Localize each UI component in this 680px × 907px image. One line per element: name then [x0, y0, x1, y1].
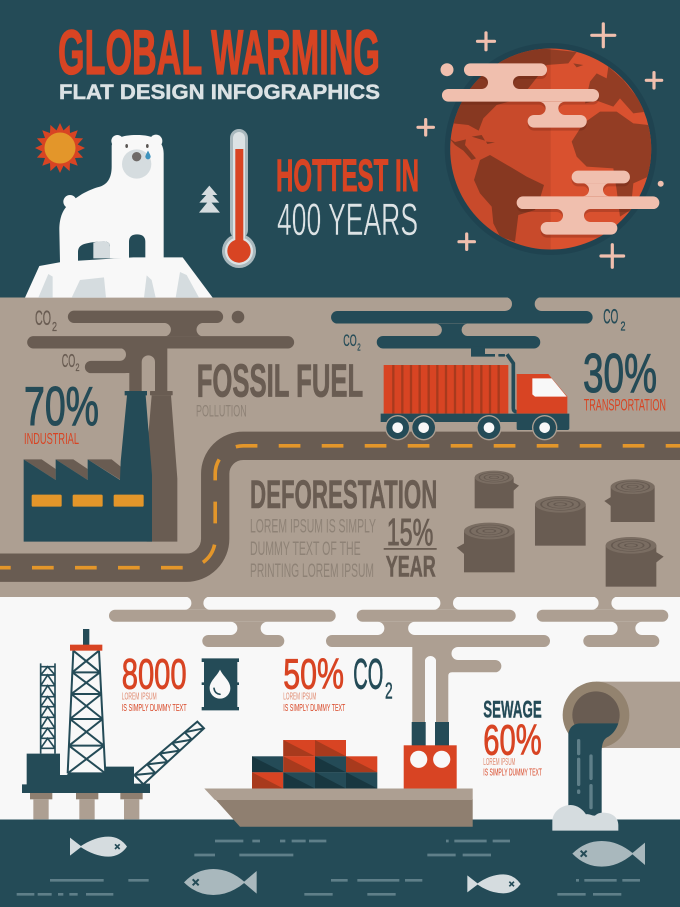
smoke: lower clouds: [115, 596, 662, 722]
caption: 60 percent: LOREM IPSUM: [483, 757, 515, 768]
fish 1: [70, 837, 127, 857]
caption: 50 percent: [283, 692, 345, 714]
caption: 8000: LOREM IPSUM: [122, 692, 157, 702]
stat: 50 percent: 50%: [283, 650, 344, 698]
label: CO2 large: 2: [385, 677, 393, 703]
water ripples: [17, 841, 640, 894]
caption: 50 percent: IS SIMPLY DUMMY TEXT: [283, 703, 345, 714]
label: CO2 large: CO: [353, 650, 383, 698]
title: GLOBAL WARMING: [58, 18, 380, 88]
icon: tree stumps: [457, 471, 664, 587]
label: CO2 truck right: [603, 305, 626, 334]
truck: [381, 347, 569, 440]
text block: lorem ipsum: [250, 515, 376, 582]
label: CO2 lower left: CO: [62, 351, 75, 371]
stat: 8000: 8000: [122, 650, 187, 698]
ship: [204, 722, 473, 827]
stat: 15 percent per year: YEAR: [386, 551, 436, 584]
caption: 50 percent: LOREM IPSUM: [283, 692, 316, 702]
stars: [418, 24, 662, 267]
chassis: [381, 414, 569, 430]
stat: 70 percent: 70%: [24, 375, 99, 437]
windows: [32, 495, 144, 507]
label: CO2 truck left: 2: [357, 343, 361, 354]
background: dark sky: [0, 0, 680, 298]
bear: [59, 135, 164, 263]
derrick: [68, 651, 105, 773]
splash: [552, 805, 618, 831]
label: CO2 top left: CO: [35, 307, 51, 330]
heading: fossil fuel: FOSSIL FUEL: [197, 355, 363, 407]
icon: polar bear on iceberg: [25, 135, 213, 298]
container: [384, 365, 508, 414]
icon: earth with clouds: [418, 24, 664, 267]
stat: 60 percent: 60%: [483, 716, 542, 764]
platform: [22, 754, 150, 793]
stump 4: [457, 523, 515, 572]
label: CO2 truck left: CO: [343, 331, 357, 350]
label: pollution: POLLUTION: [196, 402, 247, 421]
stump 5: [606, 537, 664, 587]
crane: [134, 722, 204, 784]
headline: hottest: HOTTEST IN: [276, 150, 419, 201]
background: white sky: [0, 597, 680, 820]
containers: [252, 740, 377, 788]
stat: 15 percent per year: 15%: [387, 512, 433, 554]
sewage flow: [568, 723, 618, 817]
label: sewage: SEWAGE: [483, 697, 542, 724]
label: CO2 top left: [35, 307, 57, 334]
label: CO2 lower left: 2: [76, 362, 80, 374]
hull: [204, 788, 473, 827]
brown chimney: [147, 391, 177, 542]
funnels: [412, 722, 449, 746]
caption: 8000: IS SIMPLY DUMMY TEXT: [122, 703, 187, 714]
text block: lorem ipsum: PRINTING LOREM IPSUM: [250, 560, 374, 582]
background: sea: [0, 820, 680, 907]
label: CO2 lower left: [62, 351, 80, 374]
caption: 60 percent: IS SIMPLY DUMMY TEXT: [483, 768, 542, 778]
factory: [24, 391, 177, 542]
mast: [70, 629, 102, 651]
label: CO2 top left: 2: [52, 319, 57, 334]
cab: [517, 374, 567, 414]
exhaust: [471, 347, 517, 412]
oil rig: [22, 629, 239, 819]
stat: 15 percent per year: [384, 512, 437, 584]
fish 2: [184, 869, 257, 895]
cabin: [404, 745, 457, 788]
stump 1: [475, 471, 519, 508]
heading: deforestation: DEFORESTATION: [250, 473, 437, 517]
roof shadows: [24, 459, 121, 480]
label: CO2 truck right: CO: [603, 305, 618, 328]
small tower: [41, 663, 55, 754]
stump 3: [604, 479, 655, 522]
icon: oil barrel: [202, 658, 239, 710]
rig legs: [30, 793, 143, 819]
smoke: truck: [337, 297, 586, 342]
subtitle: FLAT DESIGN INFOGRAPHICS: [59, 80, 380, 104]
pipe: [563, 682, 680, 748]
icon: sun: [35, 123, 85, 173]
headline: 400 years: 400 YEARS: [277, 194, 418, 245]
text block: lorem ipsum: LOREM IPSUM IS SIMPLY: [250, 515, 376, 537]
fish 4: [467, 874, 521, 893]
icon: tree: [199, 186, 220, 213]
clouds: [448, 70, 653, 228]
road: [0, 446, 680, 568]
text block: lorem ipsum: DUMMY TEXT OF THE: [250, 538, 361, 560]
stump 2: [535, 496, 586, 546]
icon: thermometer: [222, 129, 256, 268]
sewage pipe: [552, 682, 680, 831]
iceberg: [25, 257, 213, 298]
caption: 8000: [122, 692, 187, 714]
globe: [445, 45, 657, 257]
label: industrial: INDUSTRIAL: [24, 431, 79, 448]
label: CO2 truck right: 2: [620, 318, 626, 334]
label: CO2 large: [353, 650, 393, 703]
wheels: [385, 415, 557, 440]
caption: 60 percent: [483, 757, 542, 778]
smoke: factory: [33, 311, 288, 392]
teal building and chimney: [24, 391, 152, 542]
label: CO2 truck left: [343, 331, 361, 354]
background: tan ground: [0, 298, 680, 598]
fish 3: [572, 841, 645, 867]
